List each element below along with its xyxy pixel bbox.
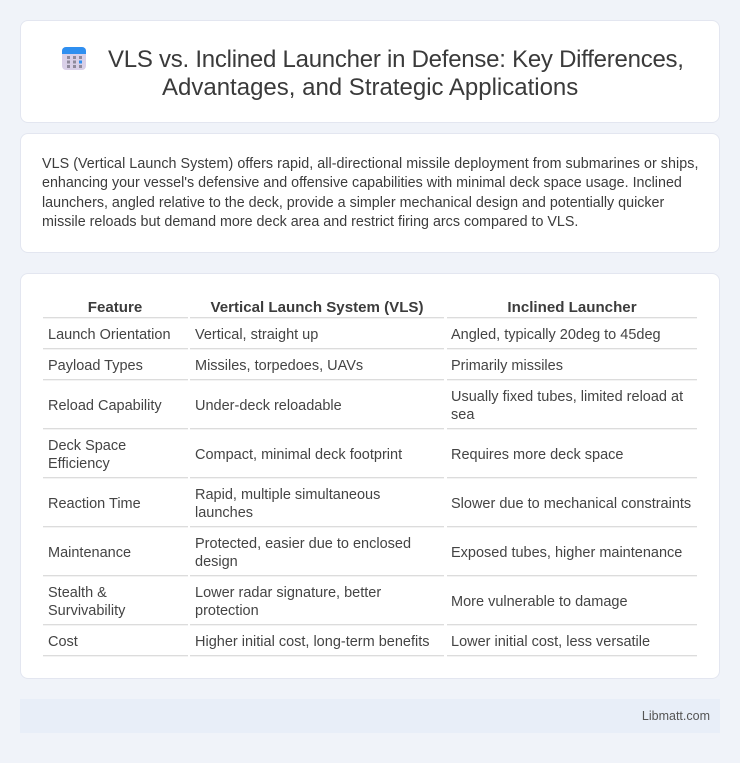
vls: launch orientation: Vertical, straight up [195,327,318,343]
row: deck space: Efficiency [48,456,110,472]
vls: maintenance: design [195,554,238,570]
row: payload types: Payload Types [48,358,143,374]
table card [20,273,720,679]
inclined: payload: Primarily missiles [451,358,563,374]
vls: cost: Higher initial cost, long-term benefits [195,634,430,650]
vls: maintenance: Protected, easier due to enclosed [195,536,411,552]
intro card [20,133,720,253]
title line 2: Advantages, and Strategic Applications [162,74,578,101]
header: VLS: Vertical Launch System (VLS) [210,299,424,316]
inclined: deck space: Requires more deck space [451,447,623,463]
vls: reload: Under-deck reloadable [195,398,342,414]
vls: maintenance [195,536,411,570]
inclined: cost: Lower initial cost, less versatile [451,634,650,650]
vls: reaction [195,487,380,521]
intro text: missile reloads but demand more deck area and restrict firing arcs compared to VLS. [42,214,578,230]
title card [20,20,720,123]
vls: deck space: Compact, minimal deck footprint [195,447,402,463]
title: VLS vs. Inclined Launcher in Defense: Key Differences, [108,46,684,73]
inclined: maintenance: Exposed tubes, higher maintenance [451,545,682,561]
vls: payload: Missiles, torpedoes, UAVs [195,358,363,374]
footer credit: Libmatt.com [642,709,710,723]
inclined: launch orientation: Angled, typically 20deg to 45deg [451,327,661,343]
vls: stealth: protection [195,603,259,619]
vls: reaction: launches [195,505,253,521]
row: deck space: Deck Space [48,438,126,454]
inclined: reaction: Slower due to mechanical constraints [451,496,691,512]
intro text: enhancing your vessel's defensive and offensive capabilities with minimal deck space usage. Inclined [42,175,682,191]
vls: reaction: Rapid, multiple simultaneous [195,487,380,503]
inclined: reload [451,389,684,423]
intro text: launchers, angled relative to the deck, provide a simpler mechanical design and potentially quicker [42,195,664,211]
intro text [42,156,698,230]
vls: stealth [195,585,381,619]
intro text: VLS (Vertical Launch System) offers rapid, all-directional missile deployment from submarines or ships, [42,156,698,172]
row: reload capability: Reload Capability [48,398,162,414]
inclined: stealth: More vulnerable to damage [451,594,628,610]
inclined: reload: sea [451,407,474,423]
inclined: reload: Usually fixed tubes, limited reload at [451,389,683,405]
row: stealth: Stealth & [48,585,107,601]
header: inclined: Inclined Launcher [507,299,637,316]
row: maintenance: Maintenance [48,545,131,561]
footer [20,699,720,733]
row: stealth: Survivability [48,603,125,619]
row: stealth [48,585,126,619]
vls: stealth: Lower radar signature, better [195,585,381,601]
header: feature: Feature [88,299,142,316]
row: cost: Cost [48,634,78,650]
row: reaction time: Reaction Time [48,496,141,512]
row: launch orientation: Launch Orientation [48,327,171,343]
row: deck space [48,438,126,472]
icon: calendar [62,47,86,70]
